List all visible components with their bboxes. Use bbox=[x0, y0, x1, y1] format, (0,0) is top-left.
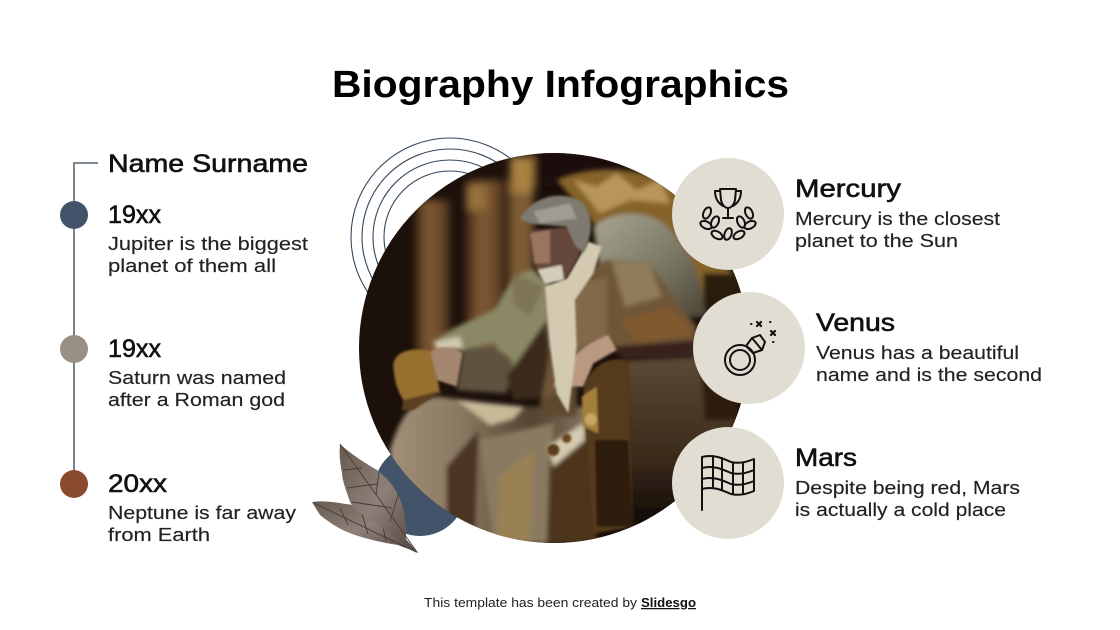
leaves decoration bbox=[312, 444, 418, 553]
footer credit: This template has been created by bbox=[424, 596, 638, 610]
icon: trophy with laurel bbox=[699, 189, 757, 241]
timeline connector bbox=[74, 163, 98, 484]
text: Venus: Venus has a beautiful bbox=[816, 342, 1019, 363]
text: Mars bbox=[795, 477, 1020, 520]
timeline entry 3 bbox=[108, 470, 297, 545]
item: Venus bbox=[693, 292, 1042, 404]
timeline name heading: Name Surname bbox=[108, 150, 308, 178]
armrests bbox=[393, 349, 633, 533]
portrait photo bbox=[359, 153, 741, 543]
concentric arcs decoration bbox=[351, 138, 549, 336]
upper leaf bbox=[340, 444, 418, 553]
drape bbox=[625, 353, 743, 527]
text: Venus: name and is the second bbox=[816, 364, 1042, 385]
timeline entry 3: Neptune is far away bbox=[108, 502, 297, 523]
icon circle: ring bbox=[693, 292, 805, 404]
hands bbox=[431, 335, 617, 387]
timeline entry 2 bbox=[108, 335, 286, 410]
text: Mars: Despite being red, Mars bbox=[795, 477, 1020, 498]
icon circle: flag bbox=[672, 427, 784, 539]
item: Mercury bbox=[672, 158, 1000, 270]
heading: Mars: Mars bbox=[795, 444, 857, 472]
footer credit: Slidesgo bbox=[641, 596, 696, 610]
scarf bbox=[545, 242, 602, 413]
icon: diamond ring bbox=[725, 322, 775, 375]
left sleeve and jacket bbox=[433, 270, 557, 400]
timeline dot 3 bbox=[60, 470, 88, 498]
columns bbox=[415, 150, 620, 367]
robe lower bbox=[390, 397, 597, 543]
timeline entry 3: 20xx bbox=[108, 470, 168, 498]
timeline entry 2: 19xx bbox=[108, 335, 161, 363]
timeline entry 3: from Earth bbox=[108, 524, 210, 545]
timeline entry 2: after a Roman god bbox=[108, 389, 285, 410]
torso and right sleeve bbox=[540, 260, 697, 417]
blue circle decoration bbox=[374, 444, 466, 536]
timeline entry 1: planet of them all bbox=[108, 255, 276, 276]
timeline dot 2 bbox=[60, 335, 88, 363]
title: Biography Infographics bbox=[332, 64, 789, 106]
text: Mercury: Mercury is the closest bbox=[795, 208, 1000, 229]
throne back bbox=[555, 166, 741, 320]
heading: Mercury: Mercury bbox=[795, 175, 902, 203]
icon circle: trophy bbox=[672, 158, 784, 270]
heading: Venus: Venus bbox=[816, 309, 895, 337]
timeline entry 1 bbox=[108, 201, 308, 276]
timeline entry 2: Saturn was named bbox=[108, 367, 286, 388]
head bbox=[520, 196, 591, 284]
timeline entry 1: Jupiter is the biggest bbox=[108, 233, 308, 254]
text: Venus bbox=[816, 342, 1042, 385]
text: Mercury bbox=[795, 208, 1000, 251]
timeline dot 1 bbox=[60, 201, 88, 229]
lower leaf bbox=[312, 501, 418, 553]
text: Mars: is actually a cold place bbox=[795, 499, 1006, 520]
timeline entry 1: 19xx bbox=[108, 201, 161, 229]
timeline panel bbox=[60, 150, 308, 545]
text: Mercury: planet to the Sun bbox=[795, 230, 958, 251]
item: Mars bbox=[672, 427, 1020, 539]
icon: checkered flag bbox=[702, 456, 754, 510]
